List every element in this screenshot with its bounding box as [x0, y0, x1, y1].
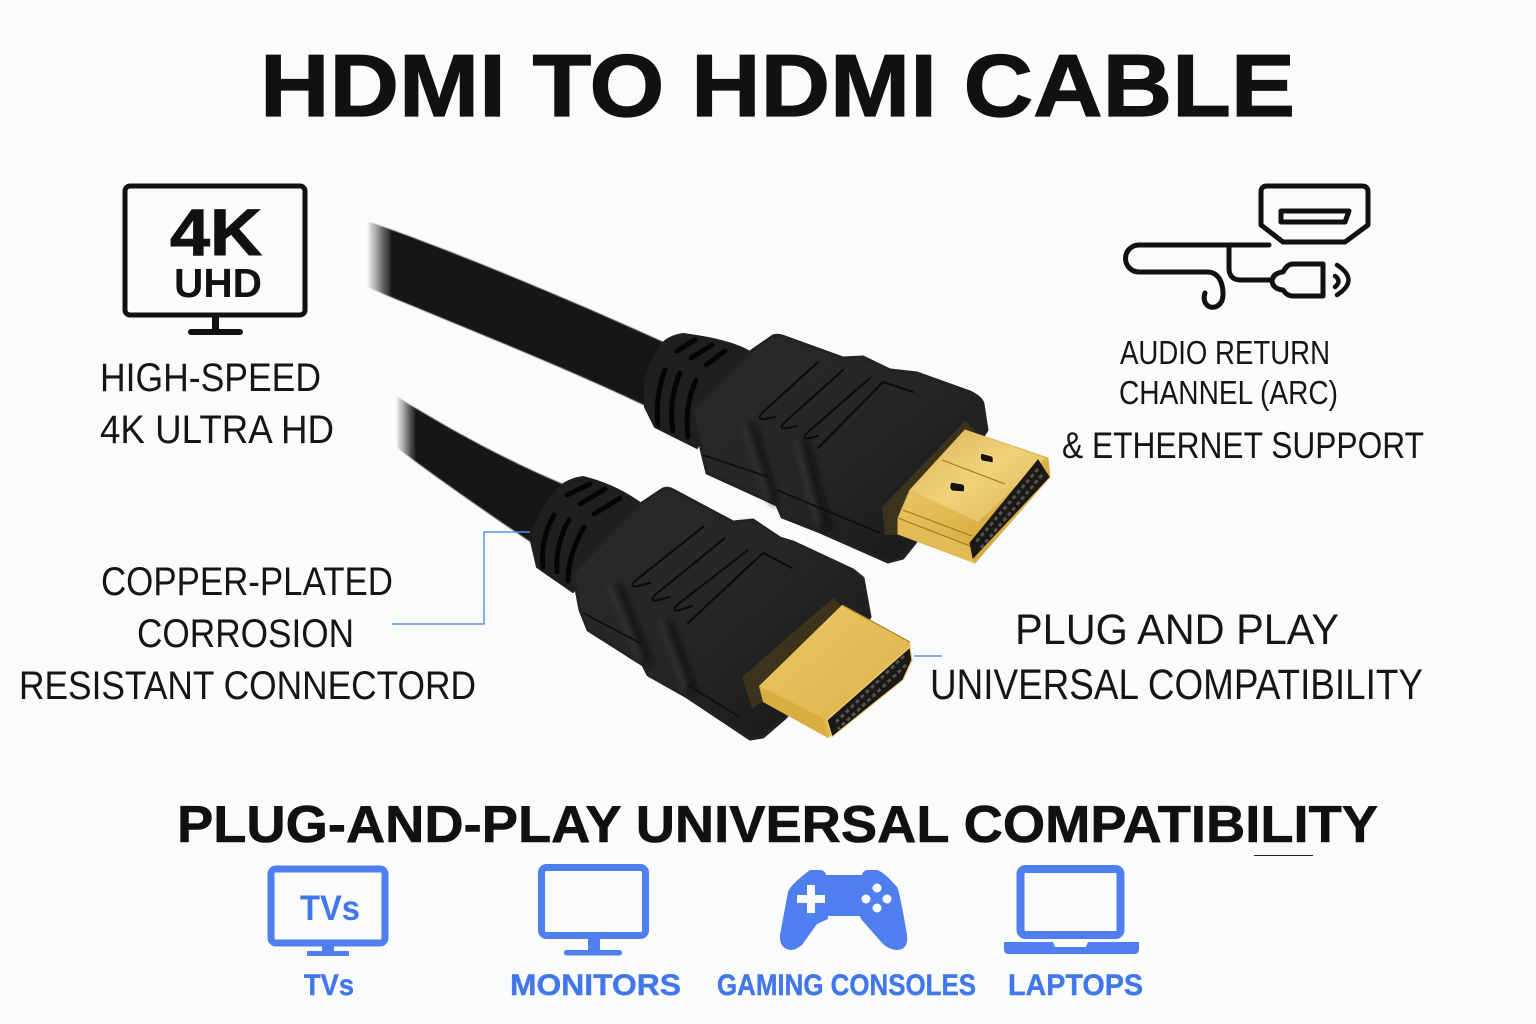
icon: TV — [271, 869, 385, 956]
text: copper-plated connector: RESISTANT CONNECTORD — [19, 664, 476, 708]
connector: lower HDMI plug — [530, 477, 912, 739]
label: gaming consoles: GAMING CONSOLES — [717, 969, 976, 1002]
label: TVs: TVs — [304, 969, 354, 1002]
text: audio return channel — [1062, 334, 1424, 466]
callout line: copper-plated — [392, 532, 530, 624]
text: audio return channel: CHANNEL (ARC) — [1119, 374, 1338, 411]
icon: TV: TVs — [300, 889, 360, 928]
text: copper-plated connector: COPPER-PLATED — [101, 560, 393, 604]
label: laptops: LAPTOPS — [1008, 969, 1143, 1002]
title: HDMI TO HDMI CABLE — [260, 36, 1295, 135]
subheading: PLUG-AND-PLAY UNIVERSAL COMPATIBILITY — [177, 796, 1378, 854]
icon: laptop — [1004, 869, 1139, 954]
icon: gaming controller — [780, 870, 907, 950]
connector: upper HDMI plug — [645, 334, 1050, 563]
label: monitors: MONITORS — [510, 969, 681, 1002]
text: plug and play — [930, 606, 1423, 709]
text: high-speed 4K — [100, 356, 334, 452]
text: copper-plated connector: CORROSION — [137, 612, 354, 656]
text: audio return channel: AUDIO RETURN — [1120, 334, 1330, 371]
cable: lower — [396, 396, 565, 545]
icon: audio return and ethernet — [1126, 186, 1368, 307]
text: plug and play: UNIVERSAL COMPATIBILITY — [930, 661, 1423, 709]
text: high-speed 4K: 4K ULTRA HD — [100, 408, 334, 452]
callout line: plug and play — [914, 655, 942, 657]
icon: 4K UHD monitor: 4K — [170, 195, 262, 269]
text: copper-plated connector — [19, 560, 476, 708]
icon: monitor — [542, 868, 646, 956]
text: plug and play: PLUG AND PLAY — [1015, 606, 1339, 654]
cable: upper — [367, 221, 670, 408]
icon: 4K UHD monitor — [125, 186, 305, 335]
text: high-speed 4K: HIGH-SPEED — [100, 356, 321, 400]
icon: 4K UHD monitor: UHD — [174, 260, 262, 306]
text: audio return channel: & ETHERNET SUPPORT — [1062, 425, 1424, 466]
